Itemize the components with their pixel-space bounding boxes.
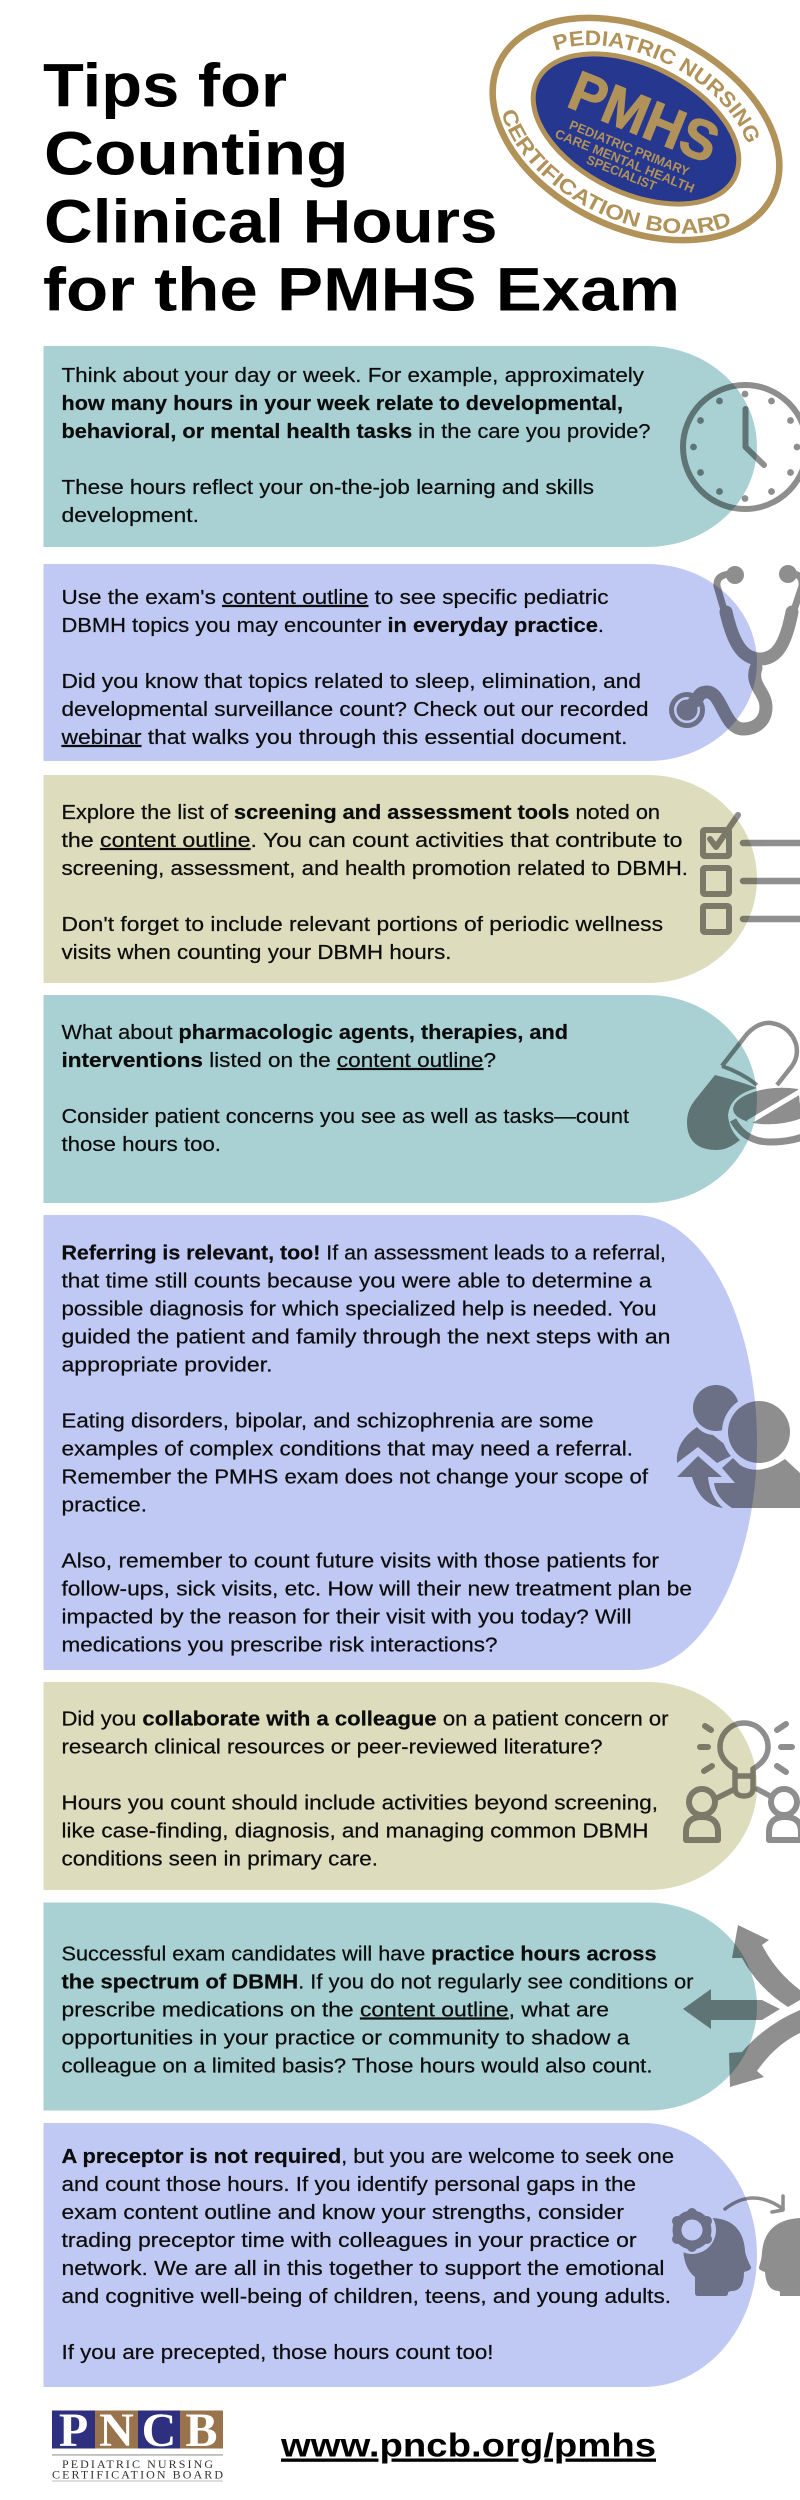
- PNCB logo: CERTIFICATION BOARD: [52, 2468, 223, 2482]
- text: pharmacologic agents: What about pharmacologic agents, therapies, and: [62, 1022, 568, 1044]
- panel: practice spectrum: [44, 1902, 800, 2110]
- text: practice spectrum: prescribe medications on the content outline , what are: [62, 2000, 609, 2022]
- text: screening tools: visits when counting your DBMH hours.: [62, 942, 452, 964]
- text: preceptor: If you are precepted, those hours count too!: [62, 2342, 494, 2364]
- text: content outline: developmental surveillance count? Check out our recorded: [62, 699, 648, 721]
- PMHS certification seal: PEDIATRIC NURSING: [552, 30, 758, 142]
- text: collaboration: [62, 1708, 669, 1870]
- text: screening tools: [62, 802, 688, 964]
- PNCB logo: B: [185, 2404, 218, 2457]
- text: preceptor: network. We are all in this together to support the emotional: [62, 2258, 664, 2280]
- PMHS certification seal: [489, 14, 783, 244]
- text: referrals: follow-ups, sick visits, etc. How will their new treatment plan be: [62, 1578, 692, 1600]
- text: content outline: Did you know that topics related to sleep, elimination, and: [62, 671, 641, 693]
- text: practice spectrum: opportunities in your practice or community to shadow a: [62, 2028, 631, 2050]
- text: referrals: medications you prescribe risk interactions?: [62, 1634, 498, 1656]
- PNCB logo: PEDIATRIC NURSING: [62, 2457, 213, 2471]
- panel: pharmacologic agents: [44, 995, 800, 1203]
- text: referrals: Remember the PMHS exam does not change your scope of: [62, 1466, 648, 1488]
- text: preceptor: and count those hours. If you identify personal gaps in the: [62, 2174, 636, 2196]
- panel: collaboration: [44, 1682, 800, 1890]
- text: practice spectrum: colleague on a limited basis? Those hours would also count.: [62, 2056, 652, 2078]
- icon: people with referral arrows: [677, 1385, 800, 1508]
- text: weekly hours: development.: [62, 505, 199, 527]
- text: content outline: DBMH topics you may encounter in everyday practice .: [62, 615, 604, 637]
- text: preceptor: [62, 2146, 674, 2364]
- text: referrals: examples of complex conditions that may need a referral.: [62, 1438, 633, 1460]
- title: Counting: [44, 120, 348, 188]
- text: pharmacologic agents: those hours too.: [62, 1134, 221, 1156]
- text: content outline: [60, 587, 648, 749]
- text: referrals: Referring is relevant, too! If an assessment leads to a referral,: [62, 1242, 666, 1264]
- text: referrals: possible diagnosis for which specialized help is needed. You: [62, 1298, 656, 1320]
- text: collaboration: Did you collaborate with a colleague on a patient concern or: [62, 1708, 669, 1730]
- icon: knowledge transfer between heads: [672, 2196, 800, 2296]
- text: screening tools: screening, assessment, and health promotion related to DBMH.: [62, 858, 688, 880]
- text: preceptor: trading preceptor time with colleagues in your practice or: [62, 2230, 637, 2252]
- panel: referrals: [44, 1215, 800, 1670]
- text: pharmacologic agents: [62, 1022, 629, 1156]
- text: practice spectrum: [62, 1944, 694, 2078]
- text: collaboration: like case-finding, diagnosis, and managing common DBMH: [62, 1820, 648, 1842]
- text: content outline: Use the exam's content outline to see specific pediatric: [62, 587, 608, 609]
- text: referrals: guided the patient and family through the next steps with an: [62, 1326, 670, 1348]
- title: Tips for: [43, 52, 287, 120]
- text: practice spectrum: the spectrum of DBMH . If you do not regularly see conditions or: [62, 1972, 694, 1994]
- PMHS certification seal: CARE MENTAL HEALTH: [553, 126, 697, 196]
- icon: lightbulb connecting two people: [686, 1723, 800, 1840]
- icon: checklist: [703, 815, 800, 932]
- text: referrals: Also, remember to count future visits with those patients for: [62, 1550, 659, 1572]
- icon: three diverging arrows: [683, 1925, 800, 2087]
- text: weekly hours: how many hours in your week relate to developmental,: [62, 393, 623, 415]
- icon: capsule and tablet: [687, 1023, 800, 1150]
- PMHS certification seal: PMHS: [561, 58, 728, 175]
- icon: stethoscope: [672, 565, 800, 729]
- PNCB logo: N: [99, 2404, 134, 2457]
- text: screening tools: the content outline . You can count activities that contribute to: [62, 830, 682, 852]
- PMHS certification seal: CERTIFICATION BOARD: [503, 110, 730, 234]
- text: screening tools: Don't forget to include relevant portions of periodic wellness: [62, 914, 663, 936]
- text: referrals: [62, 1242, 692, 1656]
- panel: preceptor: [44, 2123, 800, 2387]
- text: referrals: that time still counts because you were able to determine a: [62, 1270, 652, 1292]
- PNCB logo: [52, 2404, 223, 2482]
- text: weekly hours: [62, 365, 650, 527]
- text: collaboration: conditions seen in primary care.: [62, 1848, 378, 1870]
- text: weekly hours: behavioral, or mental health tasks in the care you provide?: [62, 421, 650, 443]
- text: weekly hours: Think about your day or week. For example, approximately: [62, 365, 644, 387]
- text: collaboration: Hours you count should include activities beyond screening,: [62, 1792, 658, 1814]
- text: referrals: Eating disorders, bipolar, and schizophrenia are some: [62, 1410, 594, 1432]
- text: collaboration: research clinical resources or peer-reviewed literature?: [62, 1736, 602, 1758]
- PMHS certification seal: SPECIALIST: [584, 152, 659, 194]
- panel: weekly hours: [44, 346, 800, 547]
- title: for the PMHS Exam: [43, 256, 680, 324]
- icon: clock: [683, 385, 800, 509]
- PMHS certification seal: PEDIATRIC PRIMARY: [567, 117, 692, 179]
- PNCB logo: P: [59, 2404, 88, 2457]
- title: Clinical Hours: [44, 188, 498, 256]
- text: referrals: impacted by the reason for their visit with you today? Will: [62, 1606, 632, 1628]
- text: preceptor: exam content outline and know your strengths, consider: [62, 2202, 624, 2224]
- text: pharmacologic agents: interventions listed on the content outline ?: [62, 1050, 496, 1072]
- title: [43, 52, 680, 324]
- text: pharmacologic agents: Consider patient concerns you see as well as tasks—count: [62, 1106, 629, 1128]
- text: content outline: webinar that walks you through this essential document.: [60, 727, 627, 749]
- PNCB logo: C: [142, 2404, 176, 2457]
- text: referrals: appropriate provider.: [62, 1354, 272, 1376]
- text: referrals: practice.: [62, 1494, 147, 1516]
- panel: content outline: [44, 564, 800, 761]
- text: screening tools: Explore the list of screening and assessment tools noted on: [62, 802, 660, 824]
- text: weekly hours: These hours reflect your on-the-job learning and skills: [62, 477, 594, 499]
- website link: www.pncb.org/pmhs: [280, 2426, 656, 2464]
- text: practice spectrum: Successful exam candidates will have practice hours across: [62, 1944, 656, 1966]
- text: preceptor: A preceptor is not required , but you are welcome to seek one: [62, 2146, 674, 2168]
- panel: screening tools: [44, 775, 800, 983]
- text: preceptor: and cognitive well-being of children, teens, and young adults.: [62, 2286, 671, 2308]
